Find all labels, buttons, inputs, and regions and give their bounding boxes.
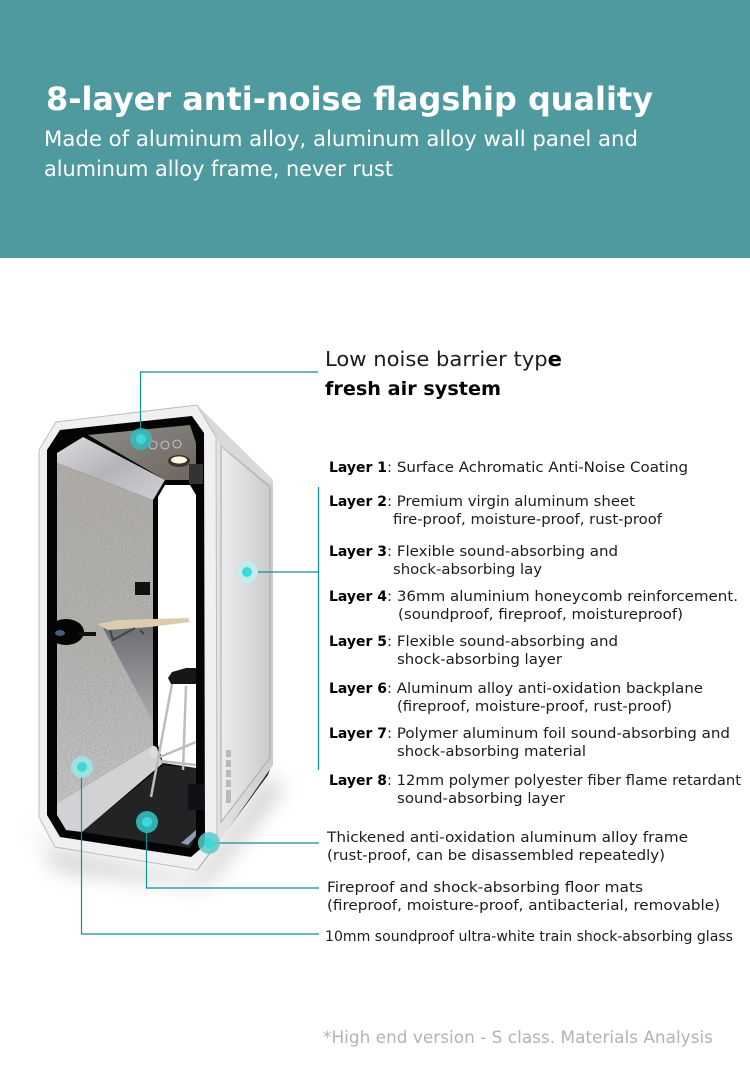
dark reflection on wall: [103, 626, 153, 722]
layer 2: Layer 2: [329, 494, 387, 510]
layer 5: shock-absorbing layer: [397, 652, 562, 668]
subtitle: Made of aluminum alloy, aluminum alloy wall panel and: [44, 127, 638, 152]
layer 2: [329, 494, 663, 528]
layer 4: Layer 4: [329, 589, 387, 605]
marker: frame: [198, 832, 220, 854]
callout: glass: 10mm soundproof ultra-white train shock-absorbing glass: [325, 929, 733, 945]
layer 8: Layer 8: [329, 773, 387, 789]
layer 1: Layer 1: [329, 460, 387, 476]
layer 8: sound-absorbing layer: [397, 791, 565, 807]
layer 7: : Polymer aluminum foil sound-absorbing and: [387, 726, 730, 742]
layer 4: (soundproof, fireproof, moistureproof): [398, 607, 683, 623]
marker: fresh air: [130, 428, 152, 450]
front white frame: [39, 405, 217, 870]
leader lines: [82, 372, 319, 934]
layer 2: : Premium virgin aluminum sheet: [387, 494, 635, 510]
floor mat: [82, 765, 196, 848]
layer 3: shock-absorbing lay: [393, 562, 542, 578]
side panel: [197, 405, 273, 845]
title: 8-layer anti-noise flagship quality: [46, 80, 653, 118]
callout: aluminum frame: (rust-proof, can be disassembled repeatedly): [327, 848, 665, 864]
layer 7: [329, 726, 730, 760]
door hinges: [188, 464, 204, 810]
side vents: [226, 750, 231, 803]
layer list: [329, 460, 741, 807]
layer 8: [329, 773, 741, 807]
footnote: *High end version - S class. Materials Analysis: [323, 1028, 713, 1048]
layer 4: : 36mm aluminium honeycomb reinforcement.: [387, 589, 738, 605]
subtitle: [44, 127, 638, 182]
layer 7: shock-absorbing material: [397, 744, 586, 760]
table: [97, 618, 190, 640]
layer 6: [329, 681, 703, 715]
control icons: [149, 440, 181, 449]
marker: wall panel: [236, 561, 258, 583]
callout: floor mats: (fireproof, moisture-proof, antibacterial, removable): [327, 898, 720, 914]
layer 5: Layer 5: [329, 634, 387, 650]
layer 1: : Surface Achromatic Anti-Noise Coating: [387, 460, 688, 476]
layer 6: (fireproof, moisture-proof, rust-proof): [397, 699, 672, 715]
layer 7: Layer 7: [329, 726, 387, 742]
black gasket: [47, 416, 205, 857]
callout: floor mats: [327, 880, 720, 914]
ceiling: [88, 425, 196, 480]
callout: floor mats: Fireproof and shock-absorbing floor mats: [327, 880, 643, 896]
layer 2: fire-proof, moisture-proof, rust-proof: [393, 512, 663, 528]
callout: fresh air system: fresh air system: [325, 378, 501, 400]
layer 4: [329, 589, 738, 623]
marker: floor mat: [136, 811, 158, 833]
door handle: [48, 619, 96, 645]
header banner: [0, 0, 750, 258]
back wall felt: [57, 463, 153, 803]
ceiling lamp: [168, 455, 190, 467]
callout: fresh air system: Low noise barrier typ e: [325, 347, 562, 371]
wall socket: [135, 582, 150, 595]
marker: glass: [71, 756, 93, 778]
layer 3: Layer 3: [329, 544, 387, 560]
phone booth product illustration: [34, 405, 280, 885]
layer 6: Layer 6: [329, 681, 387, 697]
layer 3: [329, 544, 618, 578]
base plinth shadow: [197, 763, 272, 871]
layer 6: : Aluminum alloy anti-oxidation backplane: [387, 681, 703, 697]
door opening: [158, 485, 196, 768]
subtitle: aluminum alloy frame, never rust: [44, 157, 393, 182]
callout: aluminum frame: Thickened anti-oxidation aluminum alloy frame: [326, 830, 688, 846]
layer 5: [329, 634, 618, 668]
light header: [57, 437, 165, 500]
layer 5: : Flexible sound-absorbing and: [387, 634, 618, 650]
layer 3: : Flexible sound-absorbing and: [387, 544, 618, 560]
layer 8: : 12mm polymer polyester fiber flame retardant: [387, 773, 741, 789]
callout: fresh air system: [325, 347, 562, 400]
stool: [150, 668, 196, 797]
callout: aluminum frame: [326, 830, 688, 864]
marker dots: [71, 428, 258, 854]
floor shadow: [34, 775, 280, 885]
